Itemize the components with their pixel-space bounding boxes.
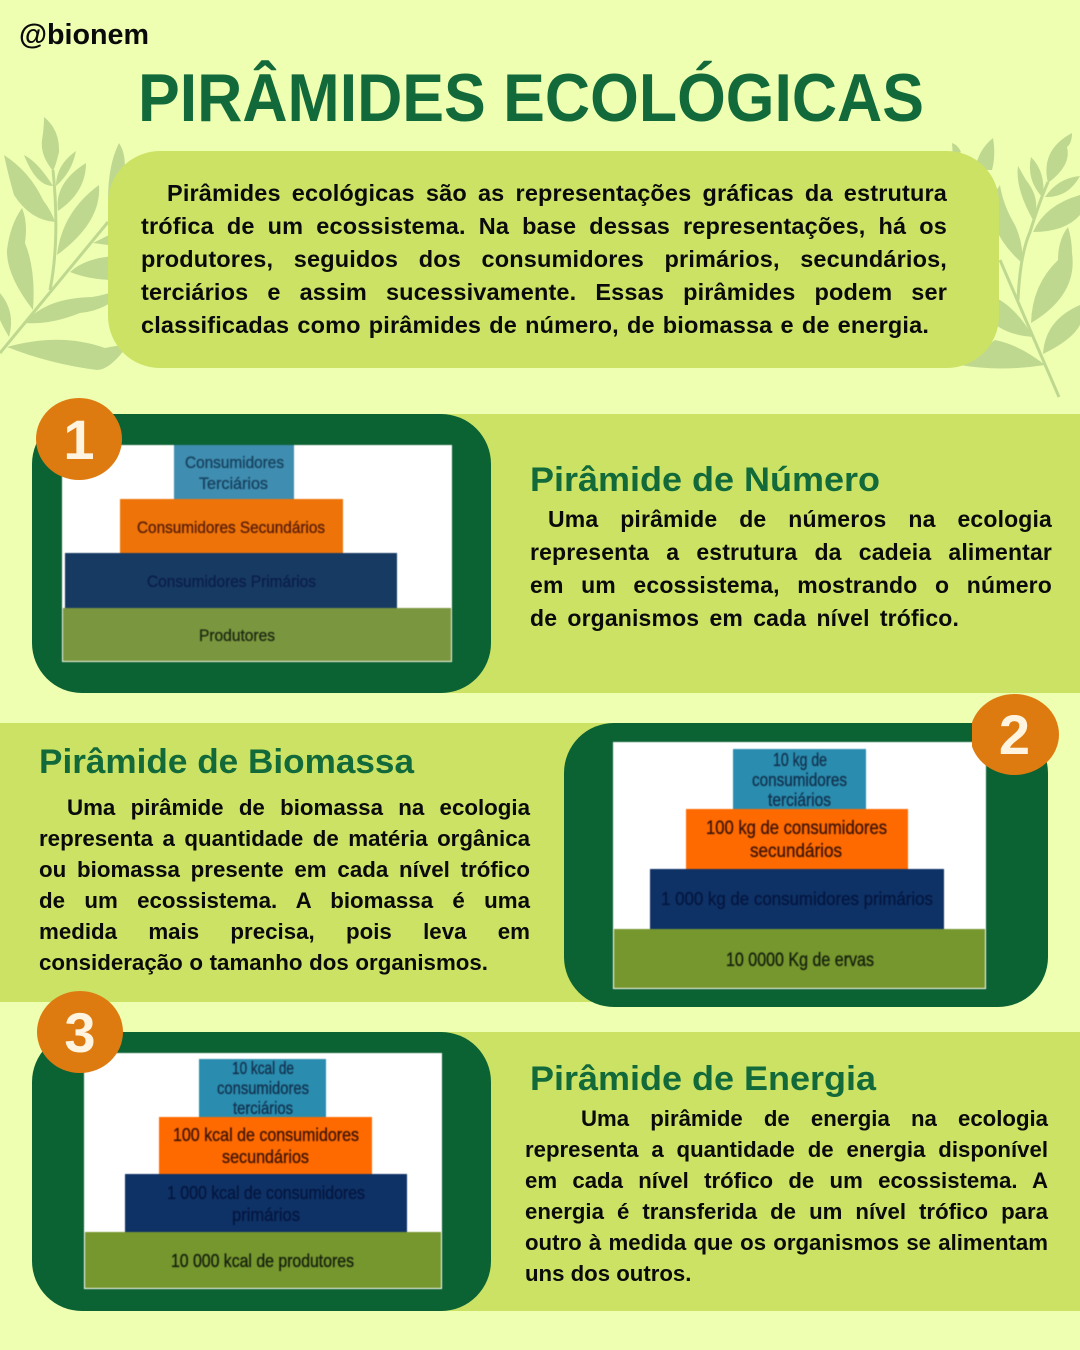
- number badge 2: 2: [999, 703, 1030, 766]
- heading: pirâmide de biomassa: Pirâmide de Biomassa: [39, 743, 415, 781]
- image frame 3: [32, 1032, 491, 1311]
- image frame 2: [564, 723, 1048, 1007]
- text: introduction: Pirâmides ecológicas são as representações gráficas da estrutura: [167, 180, 947, 206]
- text: pirâmide de número: em um ecossistema, mostrando o número: [530, 572, 1052, 598]
- heading: pirâmide de energia: Pirâmide de Energia: [530, 1060, 877, 1098]
- pyramid chart 3: terciários: [233, 1098, 293, 1118]
- text: pirâmide de energia: Uma pirâmide de energia na ecologia: [581, 1106, 1048, 1131]
- number badge 1: [36, 398, 122, 480]
- pyramid chart 2: consumidores: [752, 770, 847, 790]
- text: pirâmide de biomassa: de um ecossistema. A biomassa é uma: [39, 888, 530, 913]
- number badge 3: [37, 991, 123, 1073]
- section 1: pirâmide de número: [32, 398, 1080, 693]
- text: pirâmide de energia: [525, 1106, 1048, 1286]
- pyramid chart 3: [83, 1052, 443, 1290]
- title: PIRÂMIDES ECOLÓGICAS: [138, 59, 924, 136]
- decoration: right leaves: [952, 133, 1080, 398]
- band 2: [0, 723, 620, 1002]
- text: pirâmide de energia: representa a quantidade de energia disponível: [525, 1137, 1048, 1162]
- pyramid chart 3: consumidores: [217, 1078, 309, 1098]
- number badge 2: [970, 694, 1059, 775]
- text: introduction: trófica de um ecossistema. Na base dessas representações, há os: [141, 212, 947, 238]
- text: pirâmide de biomassa: Uma pirâmide de biomassa na ecologia: [67, 795, 530, 820]
- pyramid chart 2: 100 kg de consumidores: [706, 818, 887, 839]
- decoration: left leaves: [0, 117, 125, 370]
- text: introduction: terciários e assim sucessivamente. Essas pirâmides podem ser: [141, 278, 947, 304]
- section 3: pirâmide de energia: [32, 991, 1080, 1311]
- text: pirâmide de biomassa: medida mais precisa, pois leva em: [39, 919, 530, 944]
- pyramid chart 3: 10 kcal de: [232, 1058, 294, 1078]
- text: pirâmide de número: representa a estrutura da cadeia alimentar: [530, 538, 1052, 564]
- pyramid chart 1: [61, 444, 453, 663]
- pyramid chart 2: [612, 741, 987, 990]
- text: pirâmide de energia: uns dos outros.: [525, 1261, 691, 1286]
- pyramid chart 2: secundários: [750, 841, 842, 862]
- text: pirâmide de biomassa: consideração o tamanho dos organismos.: [39, 950, 488, 975]
- pyramid chart 3: 1 000 kcal de consumidores: [167, 1182, 365, 1203]
- text: introduction: [141, 180, 947, 338]
- pyramid chart 2: terciários: [768, 790, 831, 810]
- image frame 1: [32, 414, 491, 693]
- text: pirâmide de energia: energia é transferida de um nível trófico para: [525, 1199, 1048, 1224]
- text: pirâmide de energia: outro à medida que os organismos se alimentam: [525, 1230, 1048, 1255]
- pyramid chart 3: secundários: [222, 1146, 309, 1167]
- handle: @bionem: @bionem: [19, 19, 149, 51]
- pyramid chart 2: 10 kg de: [773, 750, 827, 770]
- section 2: pirâmide de biomassa: [0, 694, 1059, 1007]
- pyramid chart 2: 1 000 kg de consumidores primários: [661, 888, 933, 909]
- pyramid chart 3: primários: [232, 1204, 300, 1225]
- text: pirâmide de número: Uma pirâmide de números na ecologia: [548, 506, 1052, 532]
- panel: introduction: [108, 151, 999, 368]
- text: introduction: classificadas como pirâmides de número, de biomassa e de energia.: [141, 312, 929, 338]
- heading: pirâmide de número: Pirâmide de Número: [530, 461, 880, 499]
- band 1: [440, 414, 1080, 693]
- pyramid chart 1: Consumidores: [185, 453, 284, 472]
- text: pirâmide de número: de organismos em cada nível trófico.: [530, 604, 959, 630]
- band 3: [440, 1032, 1080, 1311]
- text: introduction: produtores, seguidos dos consumidores primários, secundários,: [141, 246, 947, 272]
- pyramid chart 1: Produtores: [199, 626, 275, 645]
- pyramid chart 3: 10 000 kcal de produtores: [171, 1250, 354, 1271]
- pyramid chart 1: Terciários: [199, 474, 268, 493]
- text: pirâmide de biomassa: [39, 795, 530, 975]
- number badge 3: 3: [64, 1000, 96, 1064]
- number badge 1: 1: [63, 408, 95, 470]
- text: pirâmide de número: [530, 506, 1052, 631]
- text: pirâmide de biomassa: ou biomassa presente em cada nível trófico: [39, 857, 530, 882]
- pyramid chart 2: 10 0000 Kg de ervas: [726, 950, 874, 971]
- pyramid chart 1: Consumidores Secundários: [137, 518, 325, 537]
- text: pirâmide de energia: em cada nível trófico de um ecossistema. A: [525, 1168, 1048, 1193]
- text: pirâmide de biomassa: representa a quantidade de matéria orgânica: [39, 826, 530, 851]
- pyramid chart 3: 100 kcal de consumidores: [173, 1124, 359, 1145]
- pyramid chart 1: Consumidores Primários: [147, 572, 316, 591]
